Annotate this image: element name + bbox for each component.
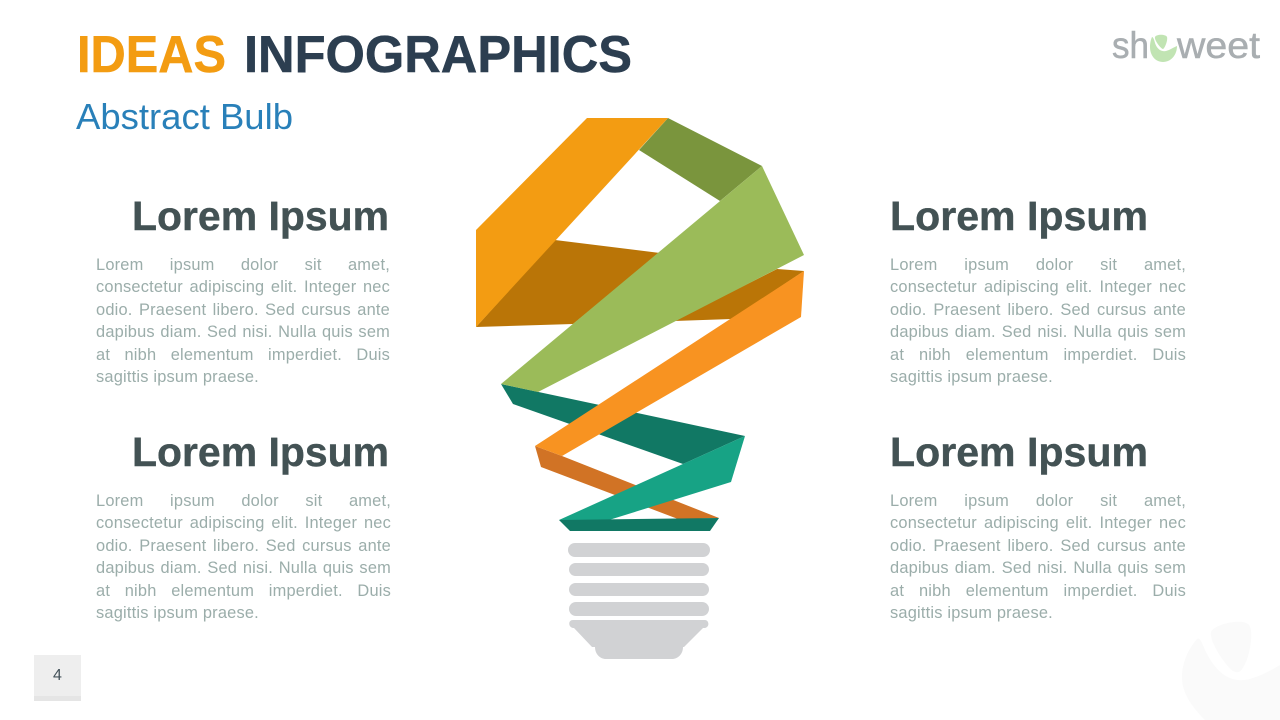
bulb ribbon: dark olive fold (639, 118, 762, 201)
text block: bottom left: sagittis ipsum praese. (96, 604, 259, 622)
text block: top right: odio. Praesent libero. Sed cursus ante (890, 301, 1186, 319)
bulb ribbon: light green band (501, 166, 804, 392)
text block: bottom left: consectetur adipiscing elit. Integer nec (96, 514, 391, 532)
text block: bottom left (96, 492, 391, 622)
page number: 4 (53, 667, 62, 684)
heading: bottom right: Lorem Ipsum (890, 429, 1148, 475)
text block: top right: Lorem ipsum dolor sit amet, (890, 256, 1186, 274)
heading: bottom left: Lorem Ipsum (132, 429, 389, 475)
bulb ribbon: orange band (535, 271, 804, 456)
text block: top left (96, 256, 390, 386)
abstract bulb illustration (476, 118, 804, 659)
text block: bottom left: at nibh elementum imperdiet. Duis (96, 582, 391, 600)
text block: bottom right: Lorem ipsum dolor sit amet, (890, 492, 1186, 510)
title (77, 26, 632, 84)
bulb screw base (568, 543, 710, 659)
text block: top left: sagittis ipsum praese. (96, 368, 259, 386)
title: INFOGRAPHICS (244, 26, 632, 84)
text block: bottom right: consectetur adipiscing elit. Integer nec (890, 514, 1186, 532)
title: IDEAS (77, 26, 226, 84)
page number (34, 655, 81, 701)
logo: showeet: weet (1176, 25, 1261, 66)
text block: top left: Lorem ipsum dolor sit amet, (96, 256, 390, 274)
text block: top left: odio. Praesent libero. Sed cursus ante (96, 301, 390, 319)
text block: top left: dapibus diam. Sed nisi. Nulla quis sem (96, 323, 390, 341)
text block: top right (890, 256, 1186, 386)
logo: showeet (1112, 25, 1261, 66)
subtitle: Abstract Bulb (76, 96, 293, 137)
bulb ribbon: dark teal fold (501, 384, 745, 464)
bulb ribbon: brown folds (476, 240, 804, 327)
text block: bottom right: at nibh elementum imperdiet. Duis (890, 582, 1186, 600)
text block: top left: consectetur adipiscing elit. Integer nec (96, 278, 390, 296)
text block: bottom right: odio. Praesent libero. Sed cursus ante (890, 537, 1186, 555)
text block: top right: consectetur adipiscing elit. Integer nec (890, 278, 1186, 296)
text block: top right: dapibus diam. Sed nisi. Nulla quis sem (890, 323, 1186, 341)
text block: bottom right: dapibus diam. Sed nisi. Nulla quis sem (890, 559, 1186, 577)
logo: showeet: sh (1112, 25, 1149, 66)
heading: top left: Lorem Ipsum (132, 193, 389, 239)
text block: top left: at nibh elementum imperdiet. Duis (96, 346, 390, 364)
text block: top right: at nibh elementum imperdiet. Duis (890, 346, 1186, 364)
text block: bottom right (890, 492, 1186, 622)
bulb ribbon: dark orange fold (535, 446, 719, 519)
heading: top right: Lorem Ipsum (890, 193, 1148, 239)
bulb ribbon: teal base (559, 518, 719, 531)
watermark logo (1182, 622, 1280, 720)
bulb ribbon: teal band (559, 436, 745, 520)
text block: top right: sagittis ipsum praese. (890, 368, 1053, 386)
text block: bottom left: Lorem ipsum dolor sit amet, (96, 492, 391, 510)
text block: bottom left: odio. Praesent libero. Sed cursus ante (96, 537, 391, 555)
text block: bottom right: sagittis ipsum praese. (890, 604, 1053, 622)
bulb ribbon: top amber band (476, 118, 668, 327)
text block: bottom left: dapibus diam. Sed nisi. Nulla quis sem (96, 559, 391, 577)
